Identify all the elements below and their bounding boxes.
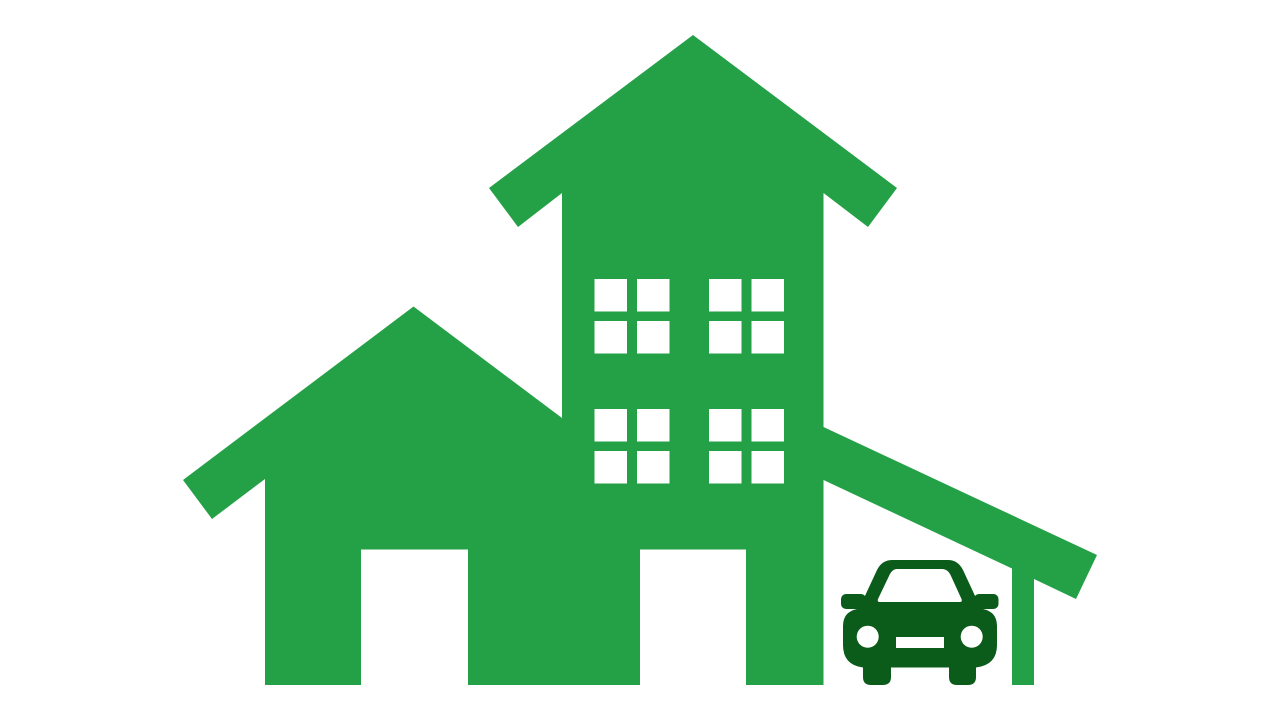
icon: right mirror xyxy=(974,594,998,609)
icon: car xyxy=(841,560,998,685)
icon: tower windows xyxy=(594,279,784,484)
icon: left mirror xyxy=(841,594,866,609)
icon: house, tower and carport silhouette xyxy=(183,35,1097,685)
